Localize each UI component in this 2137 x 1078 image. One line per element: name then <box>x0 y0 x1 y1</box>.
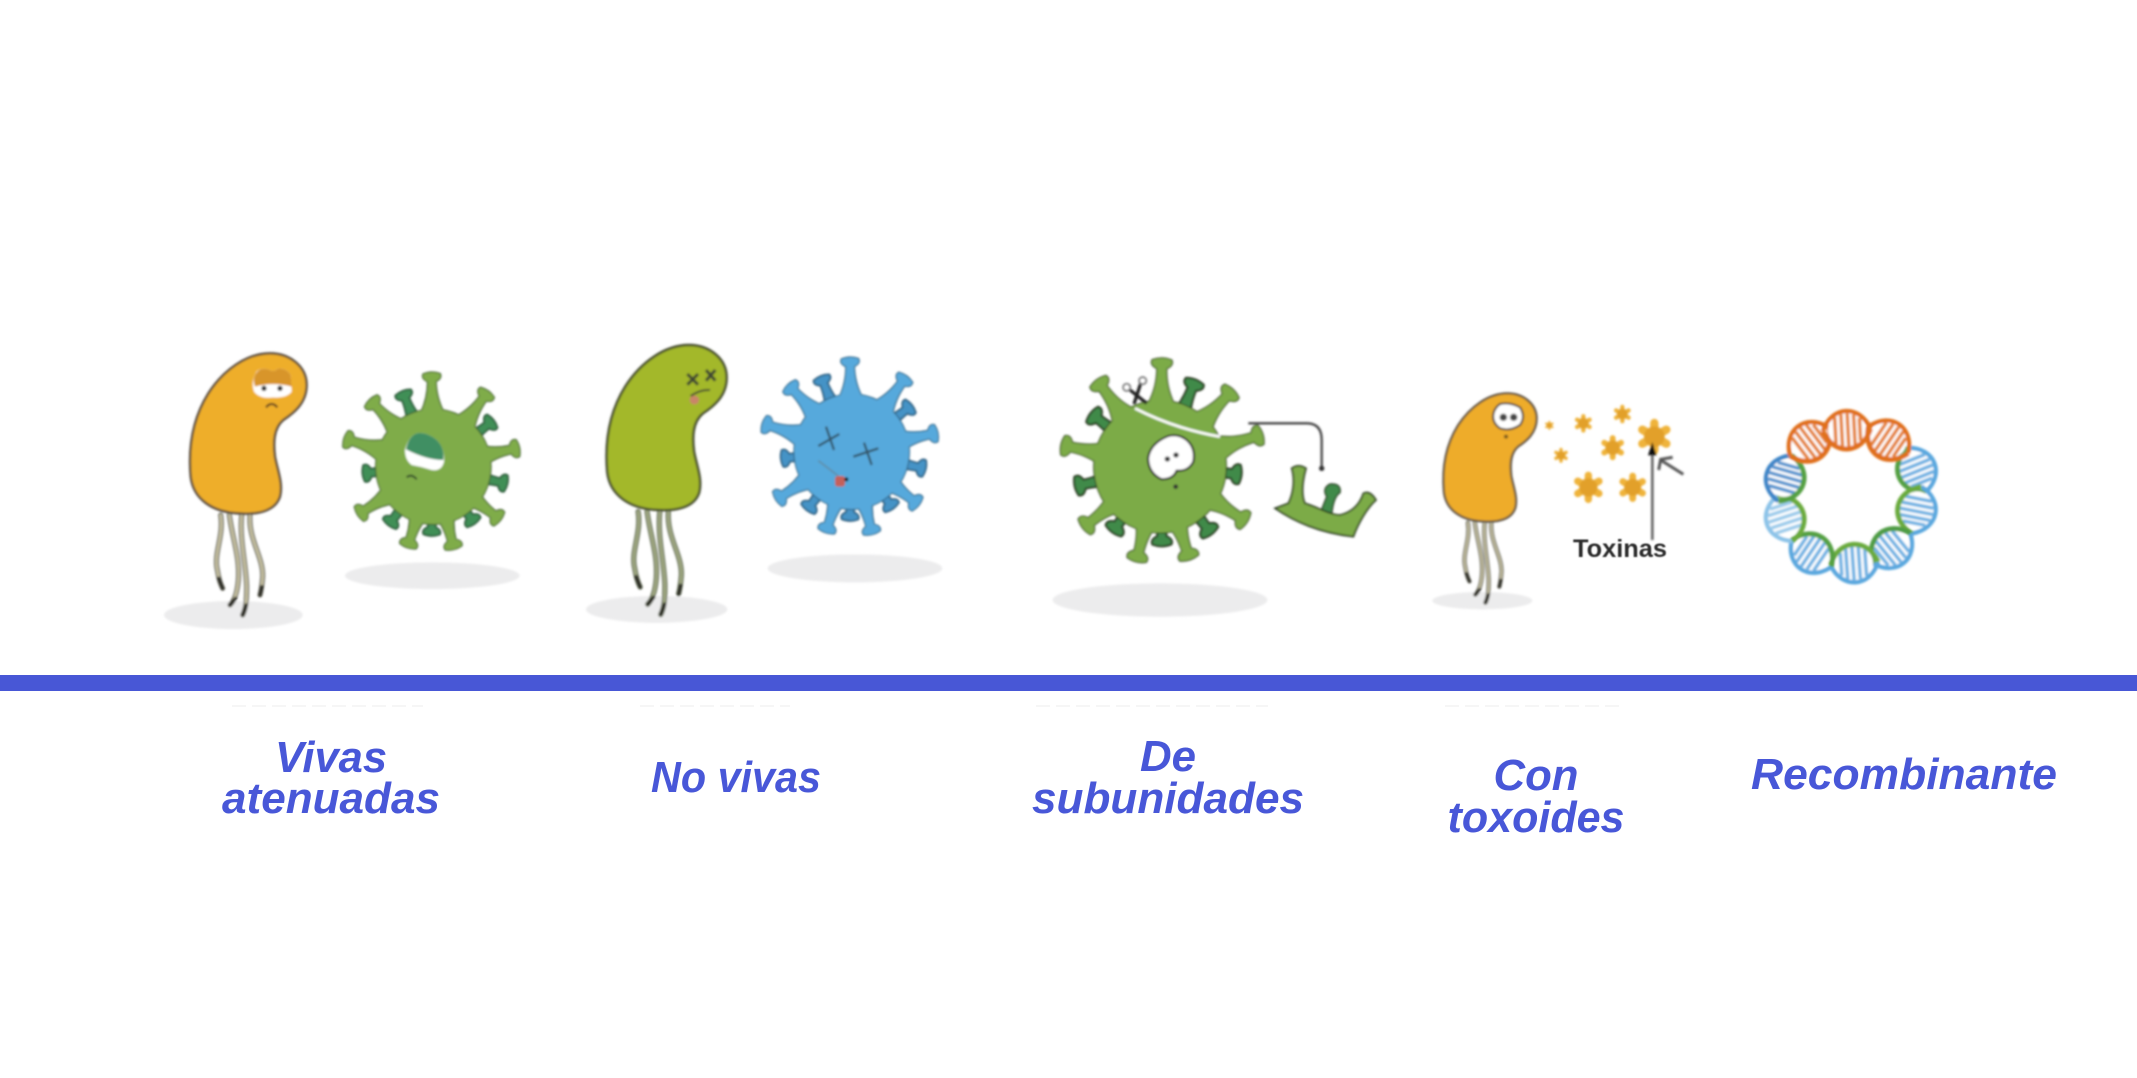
label: con toxoides <box>1448 751 1624 842</box>
blue divider bar <box>0 675 2137 691</box>
sleepy bacterium face <box>253 368 292 407</box>
shadow under bacterium <box>1432 592 1532 609</box>
flagella <box>634 512 681 615</box>
label: vivas atenuadas: atenuadas <box>222 774 440 823</box>
shadow under virus <box>768 554 942 582</box>
label: con toxoides: toxoides <box>1448 793 1624 842</box>
sleepy virus face <box>405 433 444 479</box>
shadow under bacterium <box>164 601 303 629</box>
toxin stars <box>1546 407 1666 499</box>
dead bacterium face <box>687 370 715 404</box>
label: de subunidades: subunidades <box>1032 774 1304 823</box>
bacterium face <box>1493 403 1523 439</box>
illustration: no vivas <box>586 345 942 623</box>
orange bacterium <box>190 353 307 514</box>
surprised virus face <box>1148 435 1194 489</box>
viral subunit fragment <box>1275 466 1376 537</box>
label: no vivas: No vivas <box>651 753 821 802</box>
toxinas label: Toxinas <box>1573 535 1667 563</box>
small arrow <box>1659 457 1683 474</box>
dead blue virus <box>759 357 940 537</box>
label: de subunidades <box>1032 732 1304 823</box>
label: vivas atenuadas: Vivas <box>275 733 387 782</box>
label: recombinante: Recombinante <box>1751 750 2057 799</box>
flagella <box>216 515 263 615</box>
icon: scissors <box>1123 377 1147 404</box>
label: de subunidades: De <box>1140 732 1196 781</box>
illustration: con toxoides <box>1432 393 1683 609</box>
shadow under virus <box>1053 583 1267 617</box>
green virus <box>1058 358 1267 565</box>
illustration: dna ring <box>1760 410 1943 584</box>
shadow under virus <box>345 562 520 589</box>
attenuated green virus <box>341 372 522 552</box>
orange helix segments <box>1779 410 1919 471</box>
flagella <box>1464 523 1501 603</box>
dead virus face <box>818 427 878 487</box>
label: vivas atenuadas <box>222 733 440 823</box>
cut line <box>1135 408 1220 437</box>
green and blue helix segments <box>1760 441 1943 584</box>
label: con toxoides: Con <box>1494 751 1578 800</box>
pointer arrow to toxin <box>1648 442 1657 540</box>
connector arrow <box>1248 423 1324 471</box>
illustration: de subunidades <box>1053 358 1376 617</box>
green bacterium <box>607 345 727 510</box>
illustration: vivas atenuadas <box>164 353 522 629</box>
orange bacterium <box>1443 393 1537 522</box>
shadow under bacterium <box>586 596 727 623</box>
